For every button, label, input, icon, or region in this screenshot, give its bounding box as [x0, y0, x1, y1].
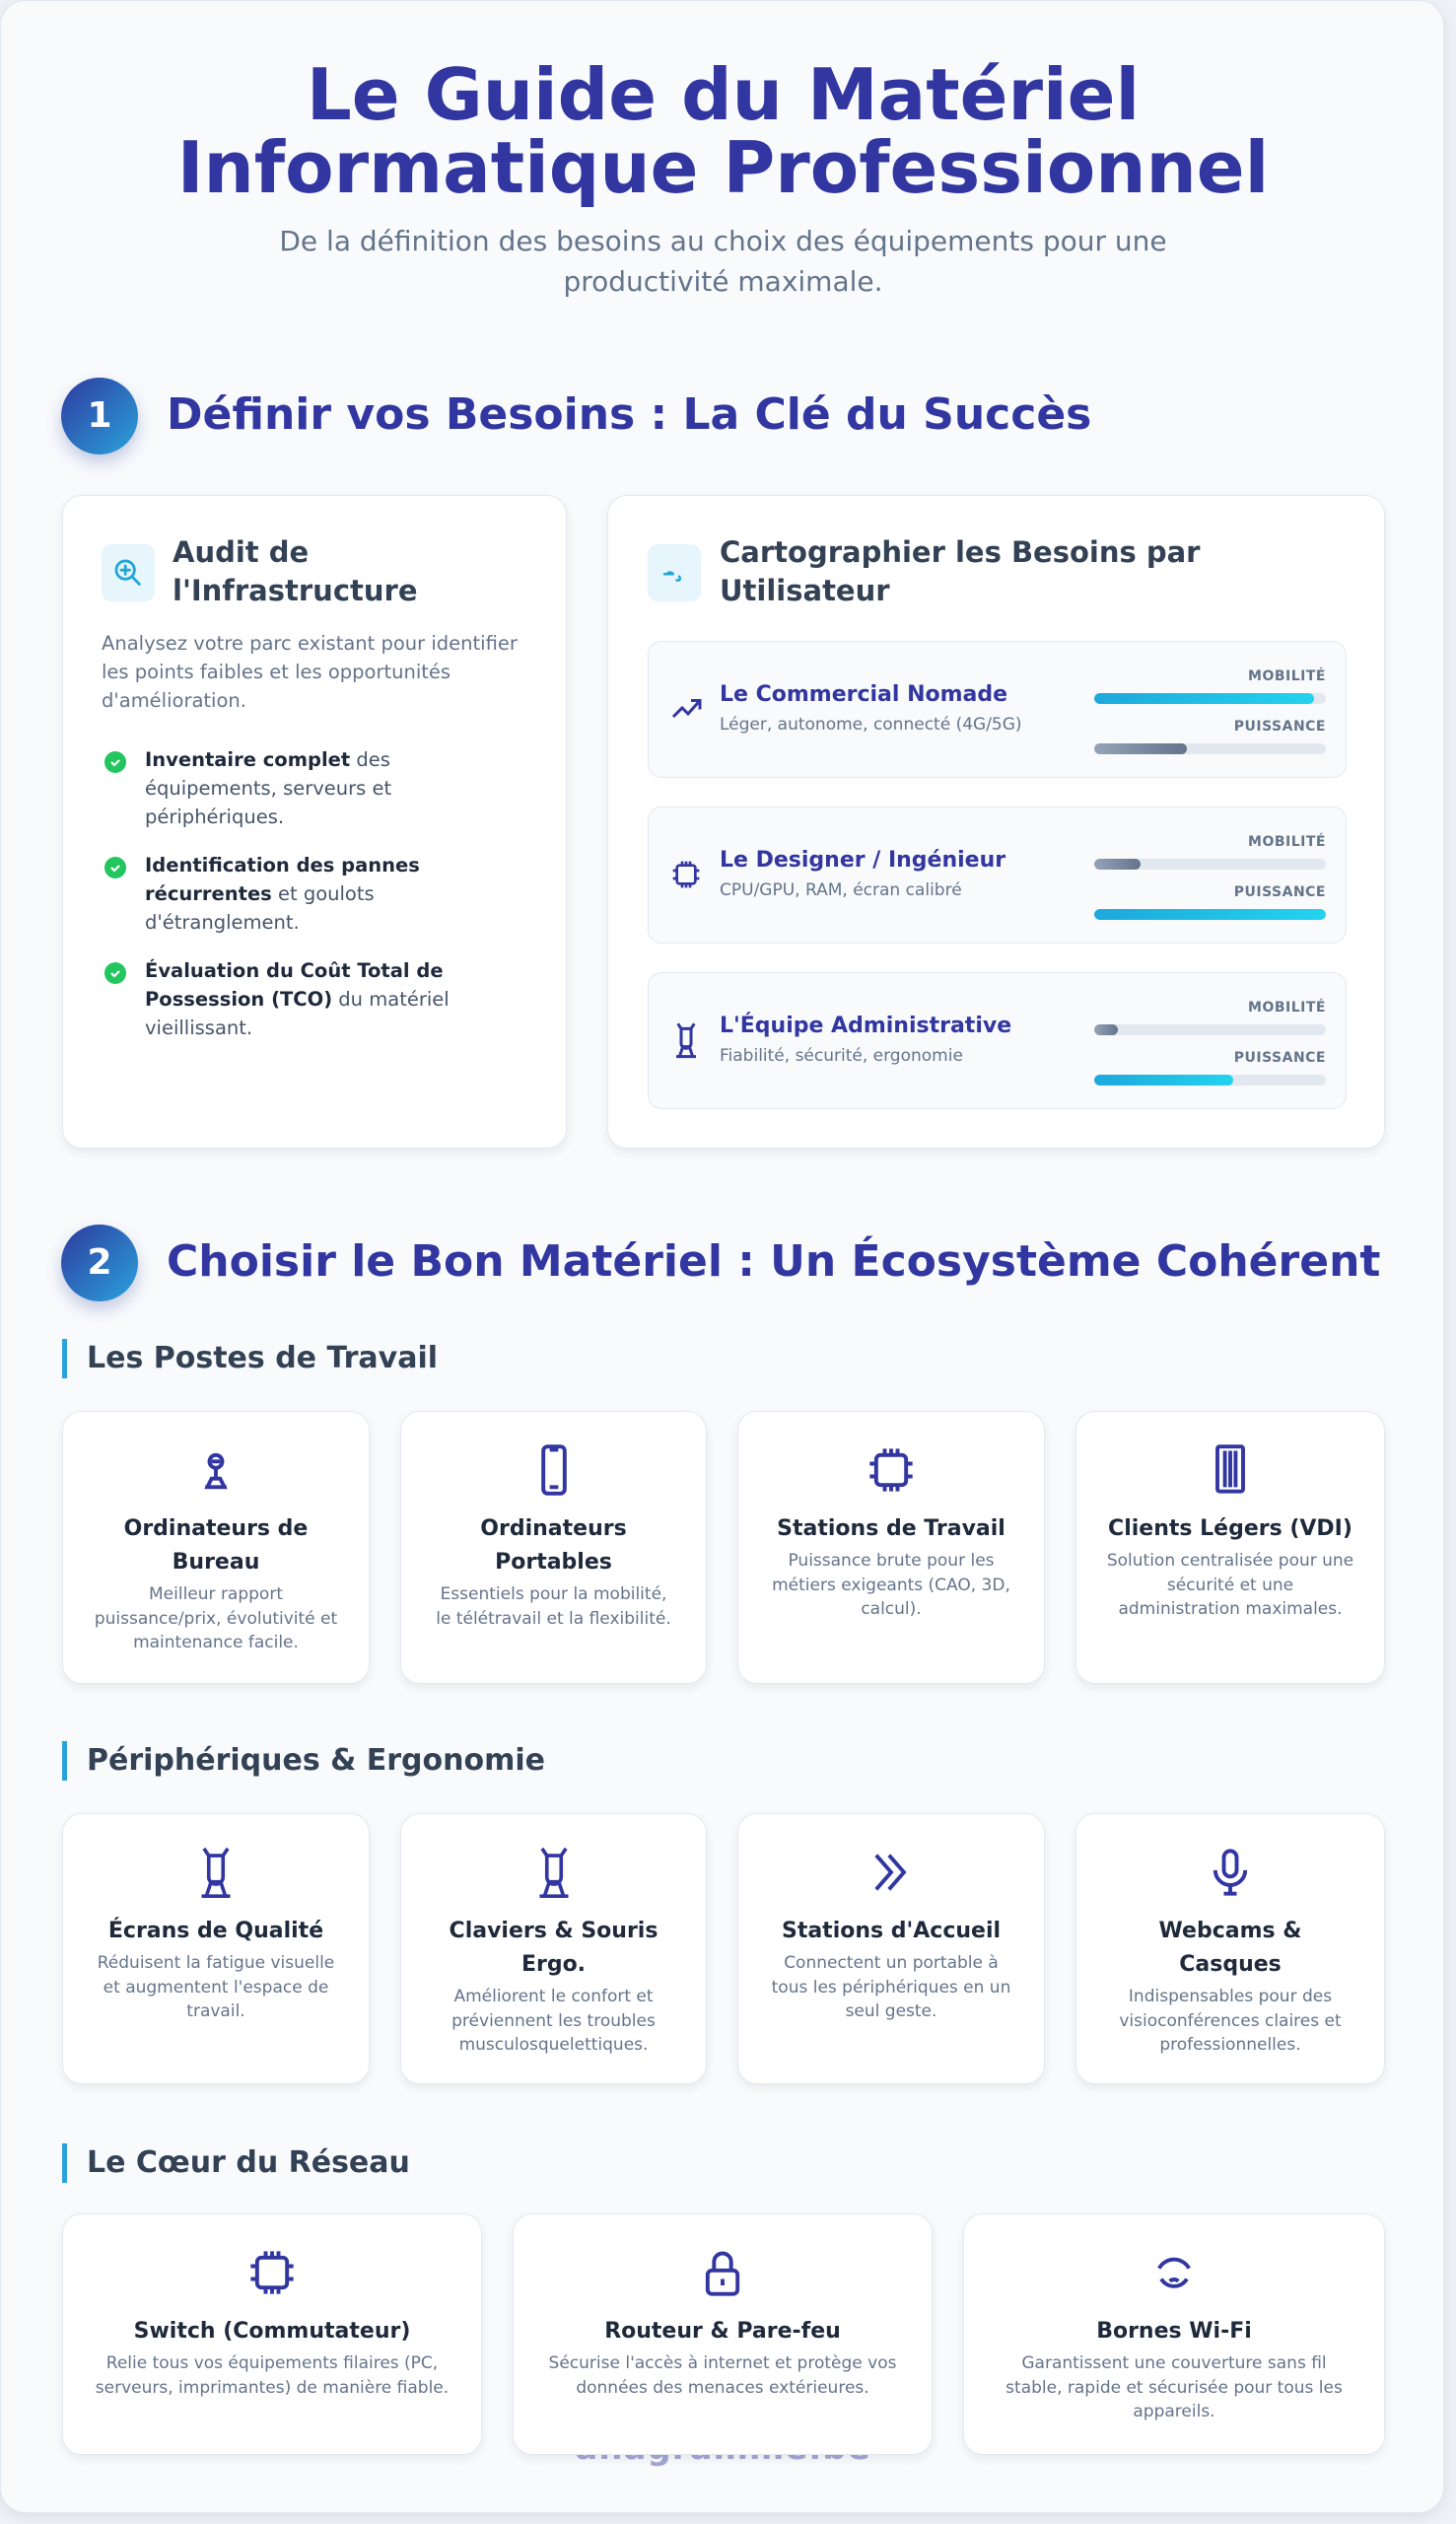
tile: screens: Réduisent la fatigue visuelle et augmentent l'espace de travail.	[98, 1953, 334, 2021]
tile: laptops: Essentiels pour la mobilité, le télétravail et la flexibilité.	[436, 1584, 671, 1629]
check item 1: Inventaire complet des équipements, serveurs et périphériques.	[145, 748, 391, 828]
bars: PUISSANCE	[1234, 884, 1326, 900]
icon: admin	[676, 1023, 696, 1059]
user name: Le Designer / Ingénieur	[720, 848, 1005, 873]
title: Informatique Professionnel	[177, 126, 1269, 209]
checklist	[104, 748, 450, 1039]
bars	[1094, 998, 1326, 1086]
tile: webcams: Webcams & Casques	[1159, 1919, 1301, 1977]
tile: laptops	[400, 1411, 707, 1684]
tile: desktop: Meilleur rapport puissance/prix, évolutivité et maintenance facile.	[95, 1584, 337, 1652]
bars: MOBILITÉ	[1248, 668, 1326, 684]
tile: router: Routeur & Pare-feu	[604, 2319, 841, 2344]
tile: switch: Switch (Commutateur)	[134, 2319, 410, 2344]
section 2 heading: Choisir le Bon Matériel : Un Écosystème Cohérent	[167, 1236, 1380, 1287]
subheading: postes de travail: Les Postes de Travail	[87, 1341, 438, 1375]
card title	[173, 535, 417, 607]
tile: screens: Écrans de Qualité	[108, 1919, 323, 1943]
subtitle: De la définition des besoins au choix des équipements pour une productivité maximale.	[279, 225, 1167, 298]
tile: docking: Connectent un portable à tous les périphériques en un seul geste.	[772, 1953, 1010, 2021]
section 2 number badge	[61, 1225, 138, 1301]
tile: desktop: Ordinateurs de Bureau	[124, 1516, 308, 1575]
tile: keyboards	[400, 1813, 707, 2084]
section 1 number badge: 1	[87, 395, 112, 436]
tile: keyboards: Claviers & Souris Ergo.	[450, 1919, 658, 1977]
tile: screens	[62, 1813, 370, 2084]
section 2 number badge: 2	[87, 1242, 112, 1283]
icon: trend	[672, 699, 702, 718]
card title: l'Infrastructure	[173, 574, 417, 607]
tile: webcams	[1075, 1813, 1385, 2084]
tile: workstations: Stations de Travail	[777, 1516, 1005, 1541]
tile: thin clients: Clients Légers (VDI)	[1108, 1516, 1352, 1541]
title: Le Guide du Matériel	[307, 53, 1140, 136]
check item 3: Évaluation du Coût Total de Possession (TCO) du matériel vieillissant.	[145, 959, 450, 1039]
tile: docking	[737, 1813, 1045, 2084]
watermark: anagramme.be	[575, 2428, 871, 2468]
tile: wifi: Garantissent une couverture sans fil stable, rapide et sécurisée pour tous les appareils.	[1005, 2353, 1343, 2421]
check item 2: Identification des pannes récurrentes et goulots d'étranglement.	[145, 854, 420, 934]
tile: wifi	[963, 2213, 1385, 2455]
tile: thin clients	[1075, 1411, 1385, 1684]
card title	[720, 535, 1201, 607]
section 1 number badge	[61, 378, 138, 455]
tile: webcams: Indispensables pour des visioconférences claires et professionnelles.	[1119, 1987, 1342, 2055]
tile: wifi: Bornes Wi-Fi	[1096, 2319, 1252, 2344]
tile: router: Sécurise l'accès à internet et protège vos données des menaces extérieures.	[549, 2353, 896, 2398]
tile: workstations: Puissance brute pour les métiers exigeants (CAO, 3D, calcul).	[772, 1551, 1010, 1619]
card description: Analysez votre parc existant pour identifier les points faibles et les opportunités d'amélioration.	[102, 632, 518, 712]
user row: admin	[648, 972, 1347, 1109]
user name: L'Équipe Administrative	[720, 1014, 1011, 1038]
panel: user needs mapping	[607, 495, 1385, 1149]
user desc: CPU/GPU, RAM, écran calibré	[720, 880, 962, 900]
title	[177, 53, 1269, 209]
subheading: peripheriques: Périphériques & Ergonomie	[87, 1743, 545, 1778]
bars	[1094, 832, 1326, 920]
tile: laptops: Ordinateurs Portables	[480, 1516, 627, 1575]
tile: workstations	[737, 1411, 1045, 1684]
card title: Cartographier les Besoins par	[720, 535, 1200, 569]
bars: PUISSANCE	[1234, 719, 1326, 735]
user row: commercial nomade	[648, 641, 1347, 778]
tile: docking: Stations d'Accueil	[782, 1919, 1001, 1943]
tile: desktop	[62, 1411, 370, 1684]
user name: Le Commercial Nomade	[720, 682, 1007, 707]
card title: Utilisateur	[720, 574, 890, 607]
bars: PUISSANCE	[1234, 1050, 1326, 1066]
icon: chip	[672, 862, 700, 887]
icon: magnifier	[102, 544, 155, 601]
panel: audit infrastructure	[62, 495, 567, 1149]
tile: switch	[62, 2213, 482, 2455]
icon: users	[648, 544, 701, 601]
bars	[1094, 666, 1326, 754]
section 1 heading: Définir vos Besoins : La Clé du Succès	[167, 389, 1091, 440]
tile: keyboards: Améliorent le confort et préviennent les troubles musculosquelettiques.	[451, 1987, 656, 2055]
card title: Audit de	[173, 535, 309, 569]
bars: MOBILITÉ	[1248, 834, 1326, 850]
user desc: Léger, autonome, connecté (4G/5G)	[720, 715, 1022, 735]
bars: MOBILITÉ	[1248, 1000, 1326, 1016]
tile: switch: Relie tous vos équipements filaires (PC, serveurs, imprimantes) de manière fiable.	[96, 2353, 449, 2398]
tile: thin clients: Solution centralisée pour une sécurité et une administration maximales.	[1107, 1551, 1353, 1619]
subheading: reseau: Le Cœur du Réseau	[87, 2145, 410, 2180]
user desc: Fiabilité, sécurité, ergonomie	[720, 1046, 963, 1066]
tile: router	[513, 2213, 933, 2455]
user row: designer	[648, 806, 1347, 944]
